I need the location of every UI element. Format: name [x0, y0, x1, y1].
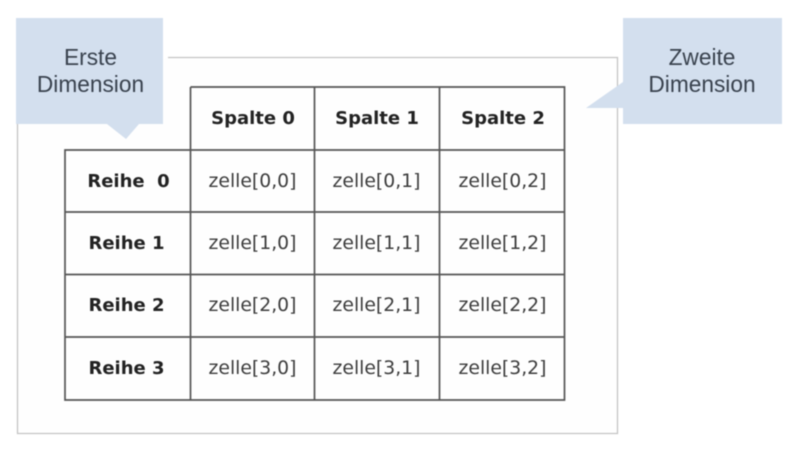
outer frame: [18, 58, 618, 434]
row 3 cells: zelle[3,1]: [333, 358, 420, 379]
column headers: [211, 108, 545, 129]
callout: Zweite Dimension: Dimension: [648, 71, 756, 97]
row 3 cells: zelle[3,2]: [459, 358, 546, 379]
column headers: Spalte 1: [335, 108, 419, 129]
row headers: [87, 171, 170, 379]
row headers: Reihe 0: [87, 171, 170, 192]
row 1 cells: zelle[1,1]: [333, 233, 420, 254]
callout: Zweite Dimension: Zweite: [669, 44, 735, 70]
row 2 cells: zelle[2,2]: [459, 295, 546, 316]
table grid: [65, 87, 564, 400]
callout: Erste Dimension: Dimension: [37, 71, 144, 97]
row headers: Reihe 3: [88, 358, 165, 379]
row 2 cells: zelle[2,1]: [333, 295, 420, 316]
row 1 cells: [209, 233, 546, 254]
row headers: Reihe 2: [88, 295, 165, 316]
row 0 cells: [209, 171, 546, 192]
row headers: Reihe 1: [88, 233, 165, 254]
column headers: Spalte 2: [461, 108, 545, 129]
row 1 cells: zelle[1,0]: [209, 233, 296, 254]
callout: Zweite Dimension: [586, 18, 782, 124]
callout: Erste Dimension: [16, 18, 163, 139]
callout: Erste Dimension: Erste: [64, 44, 117, 70]
row 0 cells: zelle[0,2]: [459, 171, 546, 192]
row 2 cells: zelle[2,0]: [209, 295, 296, 316]
row 2 cells: [209, 295, 546, 316]
column headers: Spalte 0: [211, 108, 295, 129]
row 3 cells: zelle[3,0]: [209, 358, 296, 379]
row 1 cells: zelle[1,2]: [459, 233, 546, 254]
row 0 cells: zelle[0,1]: [333, 171, 420, 192]
row 0 cells: zelle[0,0]: [209, 171, 296, 192]
row 3 cells: [209, 358, 546, 379]
